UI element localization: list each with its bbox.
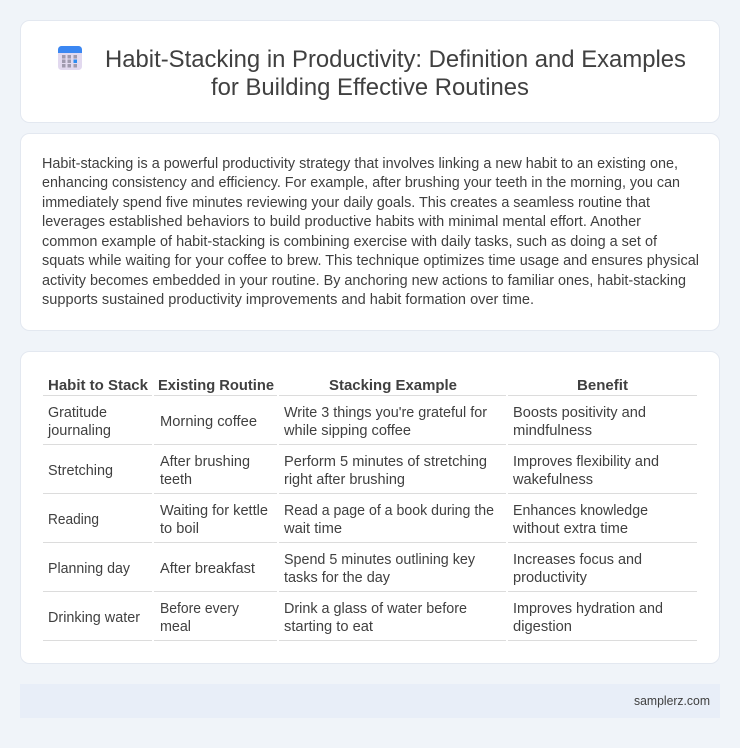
table row: planning day: tasks for the day (284, 570, 391, 586)
table row: reading (48, 503, 648, 537)
text block: description: common example of habit-stacking is combining exercise with daily tasks, such as doing a set of (42, 234, 657, 250)
table row: reading: Reading (48, 512, 99, 528)
table row: stretching: wakefulness (512, 472, 593, 488)
table header row: Benefit (577, 377, 628, 394)
footer bar (20, 684, 720, 718)
table row: drinking water: Improves hydration and (513, 601, 663, 617)
table row: planning day: After breakfast (160, 561, 255, 577)
table header row: Existing Routine (158, 377, 274, 394)
table row: reading: Enhances knowledge (513, 503, 648, 519)
footer text: samplerz.com (634, 694, 710, 708)
title: for Building Effective Routines (211, 74, 529, 101)
table row: stretching: Stretching (48, 463, 113, 479)
table row: reading: wait time (283, 521, 342, 537)
table row: drinking water: starting to eat (284, 619, 373, 635)
table row: planning day (48, 552, 642, 586)
table row: gratitude journaling: Morning coffee (160, 414, 257, 430)
table row: planning day: productivity (513, 570, 588, 586)
table row: gratitude journaling: while sipping coffee (283, 423, 411, 439)
text block: description: supports sustained productivity improvements and habit formation over time. (42, 292, 534, 308)
table row: drinking water: Drink a glass of water before (284, 601, 467, 617)
table row: drinking water: meal (160, 619, 191, 635)
table row: planning day: Increases focus and (513, 552, 642, 568)
table row: reading: without extra time (512, 521, 628, 537)
table row: stretching: Improves flexibility and (513, 454, 659, 470)
table row: stretching: right after brushing (284, 472, 405, 488)
table row: reading: Read a page of a book during the (284, 503, 494, 519)
table row: planning day: Spend 5 minutes outlining key (284, 552, 476, 568)
table row: gratitude journaling: mindfulness (513, 423, 592, 439)
table row: reading: to boil (160, 521, 199, 537)
panel: habit stacking table (20, 352, 720, 664)
table row: stretching: teeth (160, 472, 192, 488)
table row: gratitude journaling: Write 3 things you're grateful for (284, 405, 487, 421)
table row: gratitude journaling (47, 405, 646, 439)
table row: gratitude journaling: Gratitude (48, 405, 107, 421)
text block: description: Habit-stacking is a powerful productivity strategy that involves linking a new habit to an existing one, (42, 156, 678, 172)
table row: drinking water (48, 601, 663, 635)
table row: reading: Waiting for kettle (160, 503, 268, 519)
panel: introduction text (20, 134, 720, 330)
table row: drinking water: Drinking water (48, 610, 140, 626)
text block: description (42, 156, 699, 308)
table row: drinking water: digestion (513, 619, 572, 635)
table row: planning day: Planning day (48, 561, 131, 577)
text block: description: activity becomes embedded in your routine. By anchoring new actions to familiar ones, habit-stacking (42, 273, 686, 289)
table rules (43, 395, 697, 641)
table row: stretching (48, 454, 659, 488)
text block: description: leverages established behaviors to build productive habits with minimal mental effort. Another (42, 214, 641, 230)
table row: drinking water: Before every (160, 601, 240, 617)
table header row: Habit to Stack (48, 377, 149, 394)
table header row: Stacking Example (329, 377, 457, 394)
text block: description: enhancing consistency and efficiency. For example, after brushing your teeth in the morning, you can (42, 175, 680, 191)
text block: description: squats while waiting for your coffee to brew. This technique optimizes time usage and ensures physical (42, 253, 699, 269)
title: Habit-Stacking in Productivity: Definition and Examples (105, 46, 686, 73)
table row: stretching: After brushing (160, 454, 250, 470)
panel: title header (20, 20, 720, 122)
table row: gratitude journaling: journaling (47, 423, 111, 439)
table header row (48, 377, 628, 394)
text block: description: immediately spend five minutes reviewing your daily goals. This creates a seamless routine that (42, 195, 650, 211)
icon: calendar (58, 46, 82, 70)
title (105, 46, 686, 101)
table row: gratitude journaling: Boosts positivity and (513, 405, 646, 421)
table row: stretching: Perform 5 minutes of stretching (284, 454, 487, 470)
